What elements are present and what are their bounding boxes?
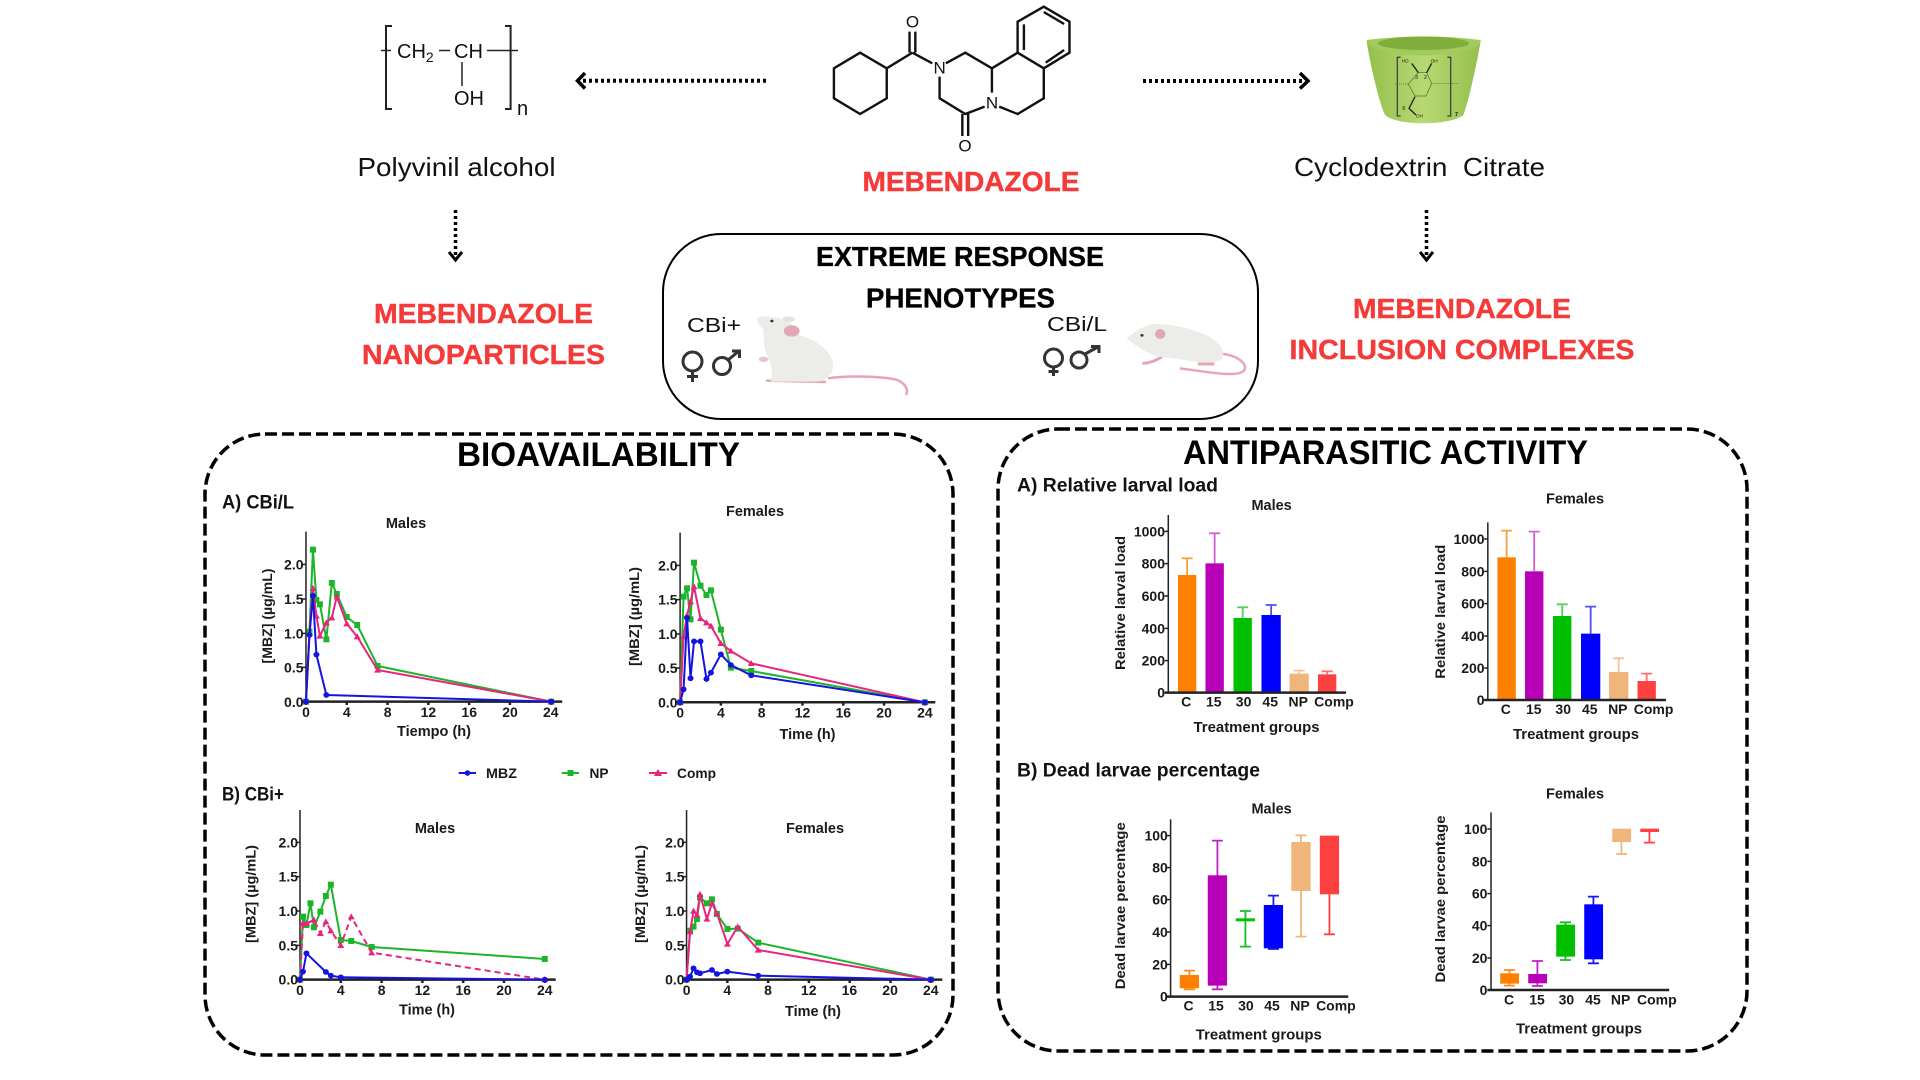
line chart: CBi/L females [626, 504, 935, 743]
icon: cyclodextrin cup: OH [1431, 59, 1438, 64]
bar chart: relative larval load males: 200 [1142, 653, 1165, 669]
bar chart: relative larval load males: NP [1288, 694, 1308, 710]
line chart: CBi+ males: 4 [337, 982, 345, 998]
box plot: dead larvae percentage males: 45 [1264, 998, 1280, 1014]
bar chart: relative larval load females: 45 [1582, 701, 1598, 717]
box plot: dead larvae percentage females: C [1504, 991, 1514, 1007]
line chart: CBi/L females: 0 [676, 704, 684, 720]
bar chart: relative larval load males: 45 [1262, 694, 1278, 710]
line chart: CBi/L females: Females [726, 504, 784, 520]
icon: cyclodextrin cup: 7 [1455, 112, 1458, 118]
box plot: dead larvae percentage males: 15 [1208, 998, 1224, 1014]
line chart: CBi/L males: 1.5 [284, 591, 304, 607]
legend: MBZ, NP, Comp: NP [590, 765, 608, 781]
line chart: CBi+ males: [MBZ] (µg/mL) [243, 845, 259, 943]
chemical structure: polyvinyl alcohol: CH [454, 41, 483, 63]
chemical structure: mebendazole molecule: N [933, 58, 946, 78]
line chart: CBi+ females: 24 [923, 982, 939, 998]
bar chart: relative larval load males: 400 [1142, 620, 1165, 636]
line chart: CBi/L females: 8 [758, 704, 766, 720]
arrow: mebendazole to cyclodextrin [1143, 73, 1308, 88]
arrow: mebendazole to polyvinil alcohol [578, 73, 766, 88]
bar chart: relative larval load females: NP [1608, 701, 1628, 717]
icon: cyclodextrin cup [1367, 36, 1481, 123]
heading: mebendazole nanoparticles [362, 298, 605, 370]
line chart: CBi/L males: 0 [302, 704, 310, 720]
box plot: dead larvae percentage males: Comp [1316, 998, 1356, 1014]
line chart: CBi/L males: 12 [421, 704, 436, 720]
bar chart: relative larval load females: 800 [1461, 563, 1485, 579]
line chart: CBi+ males: 1.5 [279, 869, 298, 885]
line chart: CBi+ females: 20 [882, 982, 898, 998]
subheading: A) CBi/L: A) CBi/L [222, 492, 294, 514]
heading: mebendazole nanoparticles: MEBENDAZOLE [374, 298, 593, 329]
icon: cyclodextrin cup: 6 [1402, 106, 1405, 112]
line chart: CBi/L males: 0.5 [284, 659, 304, 675]
line chart: CBi/L males: 1.0 [284, 625, 304, 641]
bar chart: relative larval load females: 15 [1526, 701, 1542, 717]
line chart: CBi/L males: 20 [502, 704, 518, 720]
heading: extreme response phenotypes [816, 241, 1104, 314]
line chart: CBi+ females: 8 [764, 982, 772, 998]
box plot: dead larvae percentage males [1112, 801, 1356, 1044]
box plot: dead larvae percentage females: 15 [1529, 991, 1545, 1007]
heading: antiparasitic activity: ANTIPARASITIC ACTIVITY [1183, 434, 1588, 472]
line chart: CBi+ females: Females [786, 821, 844, 837]
arrow: down to nanoparticles [449, 210, 462, 260]
line chart: CBi+ females: 0 [683, 982, 691, 998]
bar chart: relative larval load females: 1000 [1453, 531, 1485, 547]
heading: mebendazole nanoparticles: NANOPARTICLES [362, 339, 605, 370]
line chart: CBi+ males: 1.0 [279, 903, 298, 919]
icon: cyclodextrin cup: HO [1402, 59, 1409, 64]
chemical structure: polyvinyl alcohol: n [517, 98, 528, 120]
bar chart: relative larval load males: Males [1251, 498, 1292, 514]
box plot: dead larvae percentage females: Dead larvae percentage [1432, 815, 1448, 982]
line chart: CBi/L females: 1.5 [658, 592, 678, 608]
chemical structure: mebendazole molecule: N [986, 94, 998, 112]
icon: cyclodextrin cup: OH [1416, 114, 1423, 119]
box plot: dead larvae percentage males: 20 [1152, 956, 1168, 972]
box plot: dead larvae percentage females: NP [1611, 991, 1630, 1007]
bar chart: relative larval load females: 200 [1461, 660, 1485, 676]
line chart: CBi/L males: 4 [343, 704, 351, 720]
line chart: CBi+ males: 0.0 [279, 972, 298, 988]
bar chart: relative larval load males: 30 [1236, 694, 1252, 710]
line chart: CBi/L males: [MBZ] (µg/mL) [259, 568, 275, 664]
line chart: CBi/L females: 20 [876, 704, 892, 720]
bar chart: relative larval load females: 0 [1477, 692, 1485, 708]
panel: antiparasitic activity [998, 429, 1747, 1051]
line chart: CBi+ females: 16 [842, 982, 857, 998]
box plot: dead larvae percentage males: 0 [1160, 989, 1168, 1005]
box plot: dead larvae percentage males: 100 [1144, 828, 1168, 844]
line chart: CBi+ females: 1.0 [665, 903, 685, 919]
line chart: CBi+ males: 2.0 [279, 834, 298, 850]
panel: bioavailability [205, 434, 953, 1055]
bar chart: relative larval load females: 400 [1461, 628, 1485, 644]
label: polyvinil alcohol: Polyvinil alcohol [358, 152, 556, 182]
line chart: CBi/L females: 12 [795, 704, 810, 720]
line chart: CBi+ females: [MBZ] (µg/mL) [632, 845, 648, 943]
bar chart: relative larval load males: 1000 [1134, 523, 1165, 539]
line chart: CBi+ females: 4 [723, 982, 731, 998]
legend: MBZ, NP, Comp: MBZ [486, 765, 517, 781]
box plot: dead larvae percentage females: 30 [1559, 991, 1574, 1007]
line chart: CBi/L females: 4 [717, 704, 725, 720]
line chart: CBi+ males: 0.5 [279, 937, 298, 953]
bar chart: relative larval load females: 600 [1461, 596, 1485, 612]
bar chart: relative larval load females: Relative larval load [1432, 545, 1448, 679]
box plot: dead larvae percentage females: 0 [1480, 982, 1488, 998]
bar chart: relative larval load males: Relative larval load [1112, 536, 1128, 670]
line chart: CBi+ males: 24 [537, 982, 553, 998]
icon: cyclodextrin cup: 3 [1415, 75, 1418, 81]
line chart: CBi+ males: Males [415, 821, 455, 837]
line chart: CBi+ females: 0.5 [665, 937, 685, 953]
line chart: CBi+ males [243, 810, 556, 1019]
box plot: dead larvae percentage females: 20 [1472, 950, 1488, 966]
line chart: CBi+ males: 20 [496, 982, 512, 998]
box plot: dead larvae percentage females: Females [1546, 786, 1604, 802]
line chart: CBi+ females [632, 810, 942, 1020]
line chart: CBi/L males: Tiempo (h) [397, 724, 471, 740]
chemical structure: mebendazole molecule: O [906, 12, 919, 32]
chemical structure: polyvinyl alcohol: 2 [426, 49, 434, 65]
line chart: CBi/L males: 16 [461, 704, 477, 720]
box plot: dead larvae percentage males: C [1183, 998, 1194, 1014]
heading: extreme response phenotypes: PHENOTYPES [866, 282, 1055, 314]
line chart: CBi+ females: 0.0 [665, 972, 685, 988]
bar chart: relative larval load females: Treatment groups [1513, 727, 1639, 743]
chemical structure: polyvinyl alcohol: OH [454, 88, 484, 110]
heading: mebendazole inclusion complexes [1290, 293, 1634, 365]
line chart: CBi+ males: 16 [455, 982, 471, 998]
line chart: CBi+ males: 12 [415, 982, 430, 998]
chemical structure: polyvinyl alcohol [381, 26, 528, 120]
heading: mebendazole inclusion complexes: MEBENDAZOLE [1353, 293, 1571, 324]
box plot: dead larvae percentage females: 40 [1472, 918, 1488, 934]
label: CBi+ mouse with sex symbols: CBi+ [687, 315, 741, 337]
line chart: CBi/L males: 0.0 [284, 694, 304, 710]
bar chart: relative larval load males: Treatment groups [1194, 720, 1320, 736]
title: mebendazole: MEBENDAZOLE [862, 166, 1080, 197]
chemical structure: polyvinyl alcohol: CH [397, 41, 426, 63]
line chart: CBi+ males: 0 [296, 982, 304, 998]
line chart: CBi/L males: 24 [543, 704, 559, 720]
line chart: CBi+ females: 12 [801, 982, 817, 998]
line chart: CBi/L females: 24 [917, 704, 933, 720]
line chart: CBi/L males: 8 [384, 704, 392, 720]
box plot: dead larvae percentage females: Treatment groups [1516, 1021, 1642, 1037]
chemical structure: mebendazole molecule: O [958, 136, 972, 156]
bar chart: relative larval load females: Females [1546, 491, 1604, 507]
bar chart: relative larval load females: 30 [1555, 701, 1571, 717]
line chart: CBi/L females: 1.0 [658, 626, 678, 642]
heading: mebendazole inclusion complexes: INCLUSION COMPLEXES [1290, 334, 1634, 365]
heading: extreme response phenotypes: EXTREME RESPONSE [816, 241, 1104, 272]
arrow: down to inclusion complexes [1420, 210, 1433, 260]
line chart: CBi/L females: Time (h) [780, 727, 836, 743]
line chart: CBi/L females: 0.5 [658, 660, 678, 676]
line chart: CBi/L females: 2.0 [658, 557, 678, 573]
box plot: dead larvae percentage males: 60 [1152, 892, 1168, 908]
bar chart: relative larval load males: 800 [1142, 556, 1165, 572]
line chart: CBi/L females: [MBZ] (µg/mL) [626, 567, 642, 666]
bar chart: relative larval load males: 600 [1142, 588, 1165, 604]
bar chart: relative larval load males [1112, 498, 1354, 736]
panel: extreme response phenotypes [663, 234, 1258, 419]
label: CBi+ mouse with sex symbols [683, 315, 907, 395]
line chart: CBi/L males: Males [386, 516, 426, 532]
line chart: CBi+ males: 8 [378, 982, 386, 998]
label: cyclodextrin citrate: Cyclodextrin Citrate [1294, 152, 1545, 182]
subheading: A) relative larval load: A) Relative larval load [1017, 476, 1218, 496]
line chart: CBi/L males: 2.0 [284, 556, 304, 572]
legend: MBZ, NP, Comp: Comp [677, 765, 716, 781]
line chart: CBi+ females: 2.0 [665, 834, 685, 850]
box plot: dead larvae percentage females [1432, 786, 1677, 1037]
line chart: CBi/L females: 16 [836, 704, 851, 720]
bar chart: relative larval load males: Comp [1314, 694, 1354, 710]
label: CBi/L mouse with sex symbols [1044, 314, 1245, 376]
line chart: CBi/L females: 0.0 [658, 694, 678, 710]
subheading: B) dead larvae percentage: B) Dead larvae percentage [1017, 760, 1260, 782]
box plot: dead larvae percentage females: Comp [1637, 991, 1677, 1007]
bar chart: relative larval load males: 15 [1206, 694, 1222, 710]
box plot: dead larvae percentage males: 40 [1152, 924, 1168, 940]
legend: MBZ, NP, Comp [459, 765, 716, 781]
line chart: CBi/L males [259, 516, 562, 740]
heading: bioavailability: BIOAVAILABILITY [457, 436, 740, 474]
bar chart: relative larval load males: C [1181, 694, 1191, 710]
line chart: CBi+ females: Time (h) [785, 1004, 841, 1020]
label: CBi/L mouse with sex symbols: CBi/L [1047, 314, 1107, 336]
bar chart: relative larval load males: 0 [1157, 685, 1165, 701]
bar chart: relative larval load females: Comp [1634, 701, 1673, 717]
bar chart: relative larval load females: C [1501, 701, 1511, 717]
icon: cyclodextrin cup: 2 [1424, 75, 1427, 81]
line chart: CBi+ females: 1.5 [665, 869, 685, 885]
bar chart: relative larval load females [1432, 491, 1673, 743]
box plot: dead larvae percentage males: 30 [1238, 998, 1254, 1014]
box plot: dead larvae percentage males: Dead larvae percentage [1112, 822, 1128, 989]
box plot: dead larvae percentage females: 45 [1585, 991, 1601, 1007]
box plot: dead larvae percentage males: 80 [1152, 860, 1168, 876]
line chart: CBi+ males: Time (h) [399, 1003, 455, 1019]
box plot: dead larvae percentage males: NP [1290, 998, 1310, 1014]
box plot: dead larvae percentage females: 60 [1472, 886, 1488, 902]
chemical structure: mebendazole molecule [834, 7, 1069, 155]
subheading: B) CBi+: B) CBi+ [222, 784, 284, 806]
box plot: dead larvae percentage females: 100 [1464, 821, 1488, 837]
box plot: dead larvae percentage females: 80 [1472, 853, 1488, 869]
box plot: dead larvae percentage males: Treatment groups [1196, 1028, 1322, 1044]
box plot: dead larvae percentage males: Males [1251, 801, 1292, 817]
